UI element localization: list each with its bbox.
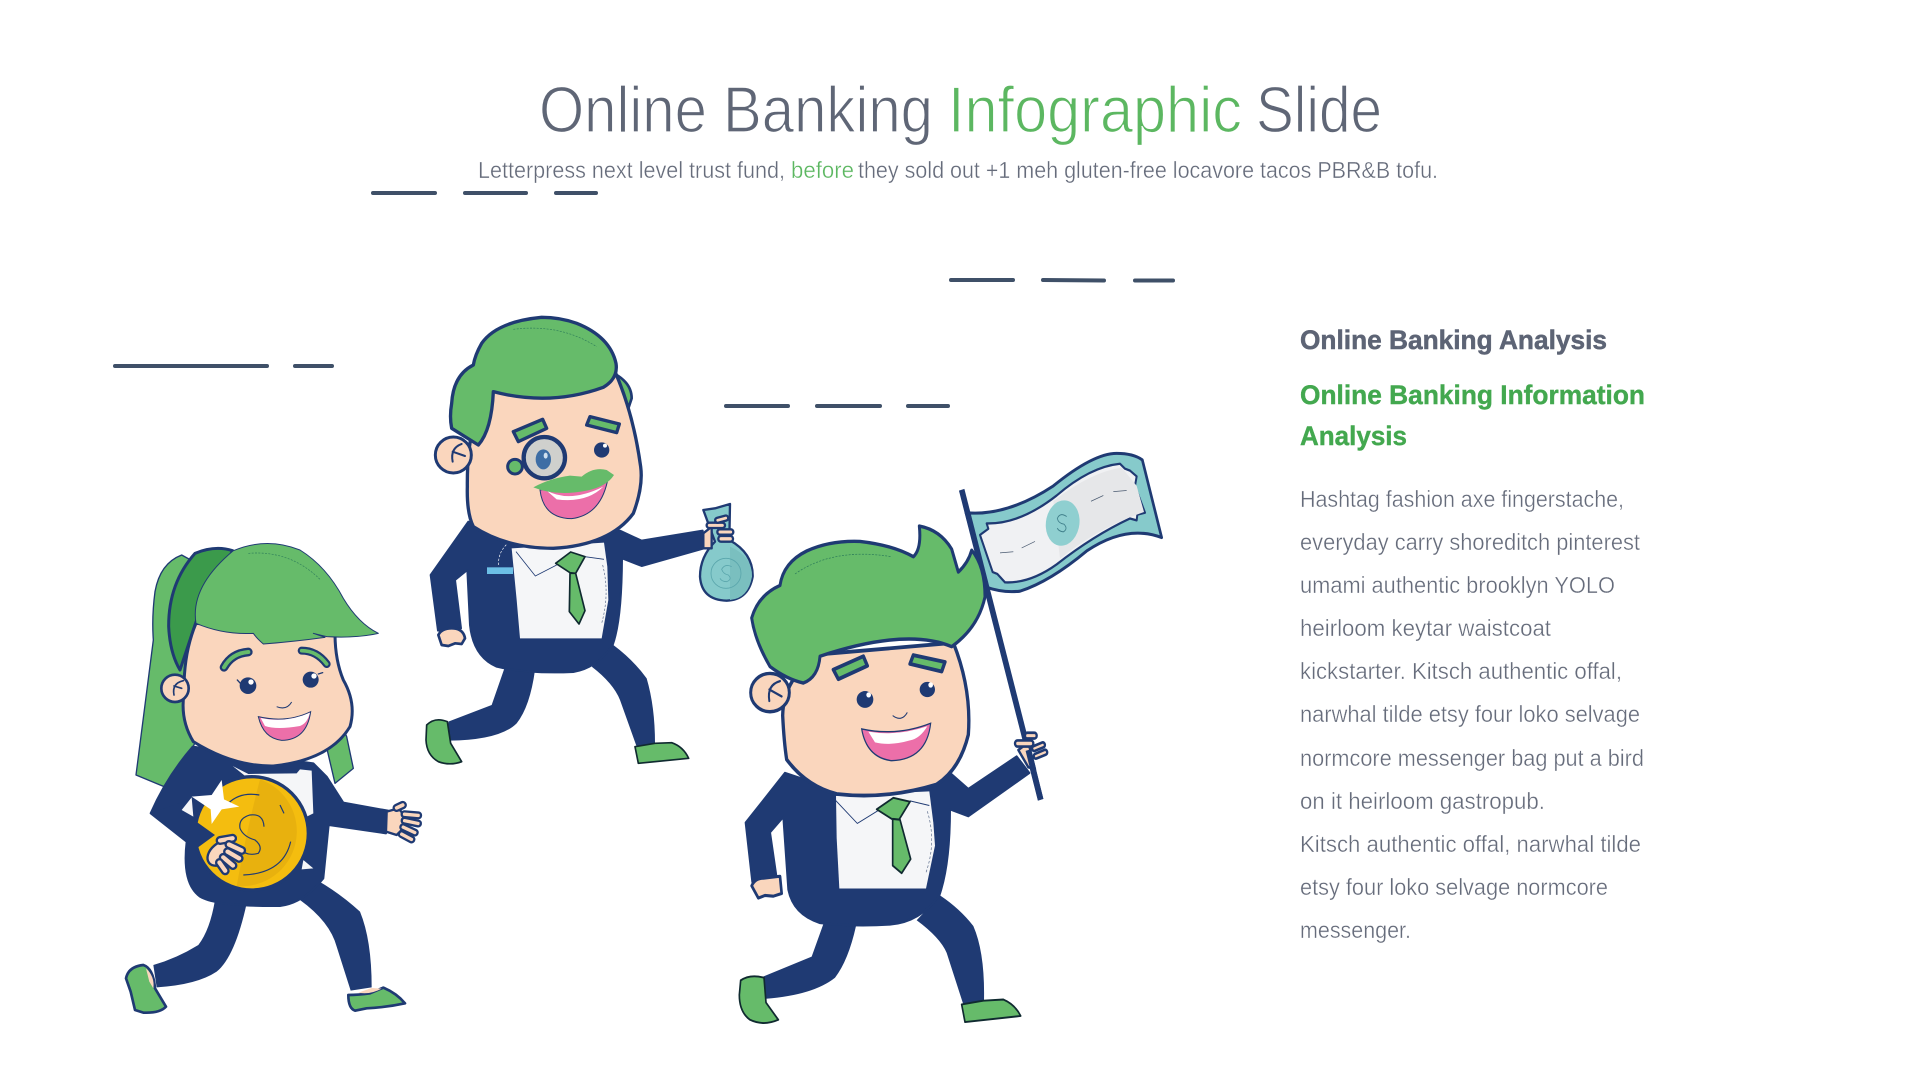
title bbox=[539, 73, 1382, 146]
hand on coin bbox=[203, 834, 246, 875]
subtitle: before bbox=[791, 157, 854, 183]
body paragraph: narwhal tilde etsy four loko selvage bbox=[1300, 701, 1640, 727]
fist bbox=[752, 876, 782, 898]
eyes bbox=[237, 672, 323, 694]
hand on pole bbox=[1015, 733, 1048, 769]
nose bbox=[893, 712, 907, 718]
ear bbox=[435, 437, 471, 473]
decorative dashes: upper right bbox=[951, 278, 1173, 282]
body paragraph: messenger. bbox=[1300, 917, 1411, 943]
right hand bbox=[386, 801, 421, 843]
banknote seal bbox=[1041, 496, 1084, 550]
hand holding bag bbox=[703, 515, 733, 548]
flag pole bbox=[962, 490, 1041, 800]
ear bbox=[161, 675, 189, 702]
pocket bbox=[487, 567, 513, 574]
flag pole front bbox=[1028, 750, 1041, 800]
body paragraph: umami authentic brooklyn YOLO bbox=[1300, 572, 1615, 598]
right shoe bbox=[348, 988, 405, 1011]
body paragraph: on it heirloom gastropub. bbox=[1300, 788, 1545, 814]
side hair bbox=[615, 374, 632, 408]
fist bbox=[438, 628, 465, 646]
decorative dashes: top centre bbox=[373, 191, 596, 195]
jacket and torso bbox=[151, 747, 388, 906]
mustache bbox=[533, 469, 614, 493]
body paragraph: heirloom keytar waistcoat bbox=[1300, 615, 1552, 641]
shirt collar bbox=[835, 800, 929, 823]
face bbox=[183, 623, 352, 766]
man character with flag bbox=[739, 453, 1162, 1023]
eyebrows bbox=[224, 651, 327, 667]
banknote flag outer bbox=[966, 453, 1162, 592]
shirt bbox=[836, 791, 935, 889]
monocle bbox=[508, 437, 565, 478]
title: Online Banking bbox=[539, 73, 933, 146]
subheading: Online Banking Information bbox=[1300, 380, 1645, 410]
face bbox=[467, 372, 641, 548]
eye bbox=[594, 442, 609, 458]
face bbox=[783, 643, 969, 796]
body paragraph: kickstarter. Kitsch authentic offal, bbox=[1300, 658, 1622, 684]
left shoe bbox=[739, 976, 778, 1023]
legs bbox=[763, 895, 984, 1004]
subtitle bbox=[478, 157, 1438, 183]
tie bbox=[877, 798, 911, 873]
title: Infographic bbox=[948, 73, 1242, 146]
mouth bbox=[258, 712, 311, 740]
ear bbox=[751, 673, 789, 712]
jacket and torso bbox=[431, 522, 704, 672]
body paragraph: Hashtag fashion axe fingerstache, bbox=[1300, 486, 1624, 512]
right shoe bbox=[635, 743, 689, 763]
left shoe bbox=[126, 965, 166, 1013]
body paragraph bbox=[1300, 486, 1644, 943]
right shoe bbox=[962, 1000, 1021, 1022]
legs bbox=[153, 880, 372, 991]
woman character holding coin bbox=[126, 543, 421, 1013]
tie bbox=[556, 552, 585, 624]
money bag bbox=[700, 504, 753, 601]
heading: Online Banking Analysis bbox=[1300, 325, 1607, 355]
sparkle bbox=[192, 780, 239, 824]
subtitle: Letterpress next level trust fund, bbox=[478, 157, 785, 183]
body paragraph: etsy four loko selvage normcore bbox=[1300, 874, 1608, 900]
shirt collar bbox=[516, 552, 604, 576]
decorative dashes: left bbox=[115, 364, 332, 368]
body paragraph: normcore messenger bag put a bird bbox=[1300, 745, 1644, 771]
legs bbox=[448, 645, 655, 747]
left shoe bbox=[426, 720, 462, 764]
eyebrows bbox=[833, 655, 945, 679]
shirt bbox=[182, 766, 313, 869]
back hair bbox=[136, 555, 353, 789]
body paragraph: everyday carry shoreditch pinterest bbox=[1300, 529, 1641, 555]
body paragraph: Kitsch authentic offal, narwhal tilde bbox=[1300, 831, 1641, 857]
panel: analysis text bbox=[1300, 325, 1645, 943]
flag bbox=[966, 453, 1162, 592]
title: Slide bbox=[1256, 73, 1382, 146]
front hair bbox=[195, 543, 378, 644]
hair bbox=[752, 526, 985, 683]
hair bbox=[450, 317, 616, 445]
nose bbox=[277, 702, 292, 708]
subheading bbox=[1300, 380, 1645, 451]
eyes bbox=[857, 682, 935, 708]
banknote flag inner bbox=[980, 464, 1145, 582]
eyebrows bbox=[513, 417, 619, 442]
subheading: Analysis bbox=[1300, 421, 1407, 451]
gold coin bbox=[195, 777, 308, 890]
mouth bbox=[862, 723, 931, 761]
headband bbox=[169, 548, 233, 670]
shirt bbox=[512, 543, 608, 638]
decorative dashes: middle bbox=[726, 404, 948, 408]
mouth bbox=[540, 482, 607, 519]
left arm over coin bbox=[150, 800, 215, 848]
man character with money bag bbox=[426, 317, 753, 764]
subtitle: they sold out +1 meh gluten-free locavore tacos PBR&B tofu. bbox=[858, 157, 1438, 183]
jacket and torso bbox=[746, 756, 1029, 925]
